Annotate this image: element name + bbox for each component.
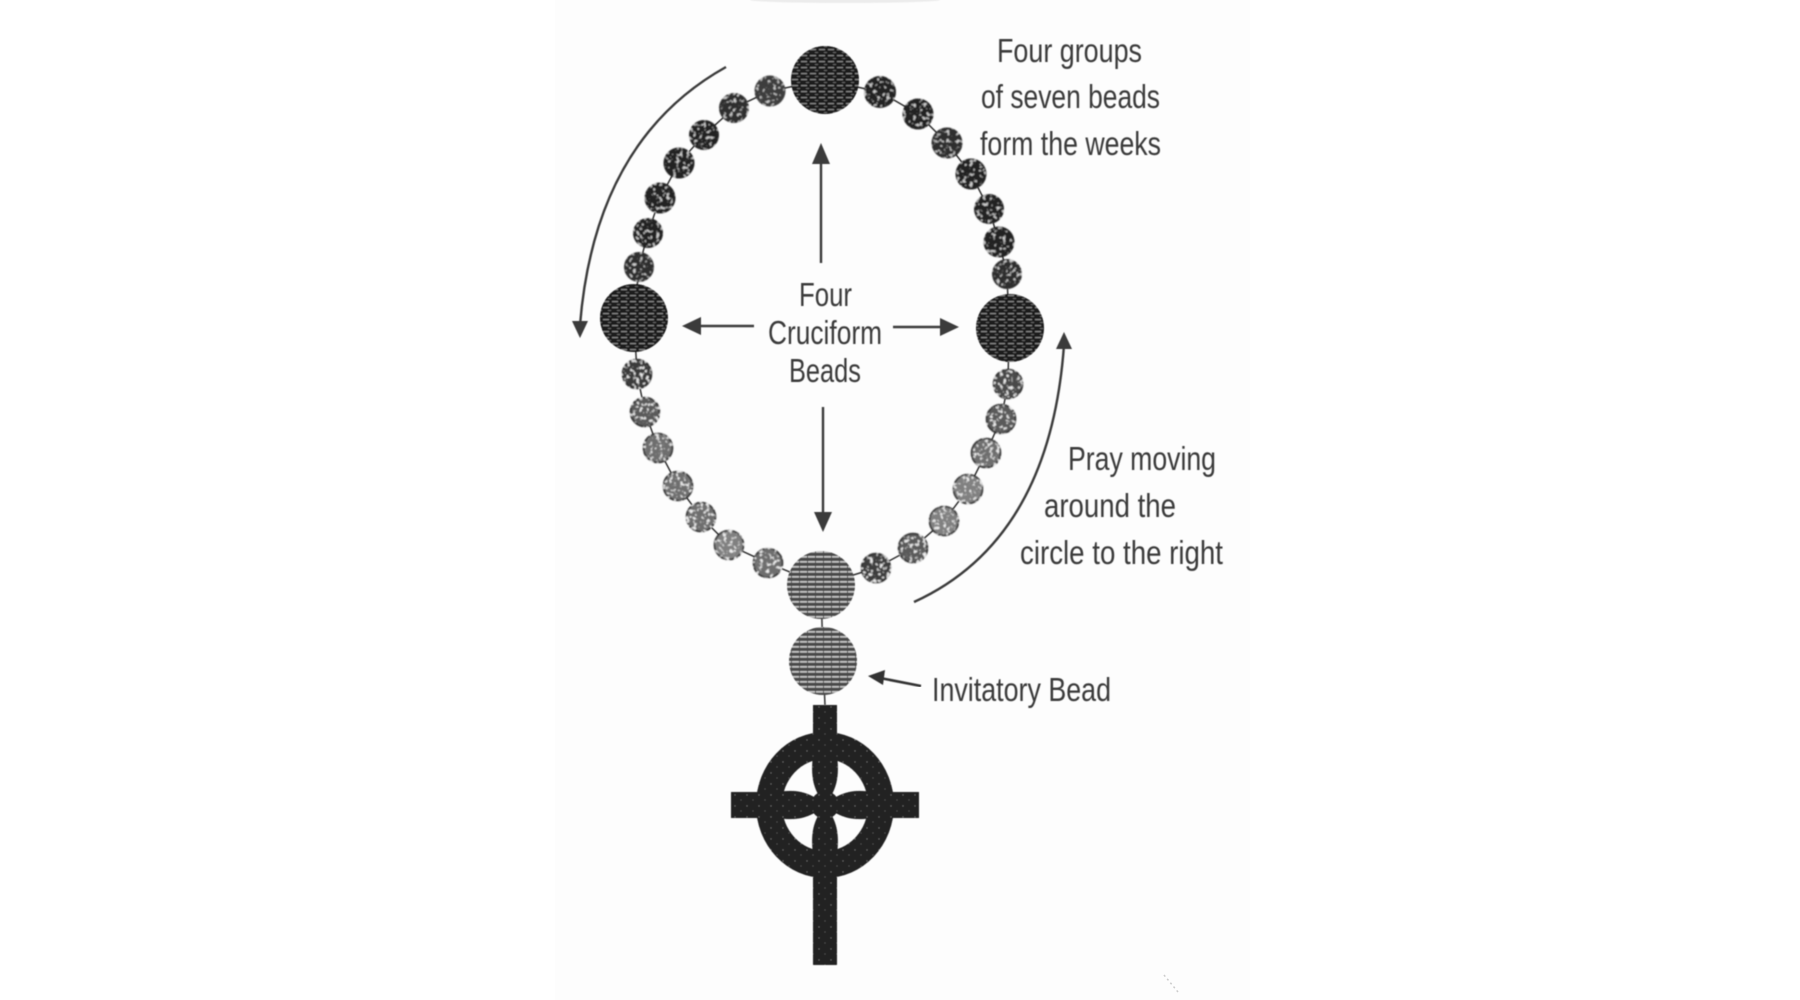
arrow: up to top bead (812, 143, 830, 263)
label: pray moving around the circle: Pray moving (1068, 440, 1216, 477)
label: four cruciform beads: Four (799, 276, 852, 313)
label: pray moving around the circle: circle to the right (1020, 534, 1223, 571)
arrow: curved right, moving around the circle (914, 332, 1072, 602)
label: pray moving around the circle: around the (1044, 487, 1176, 524)
arrow: right to right bead (893, 318, 959, 336)
arrow: to invitatory bead (868, 670, 921, 686)
label: four cruciform beads: Cruciform (768, 314, 882, 351)
label: four groups of seven beads: form the weeks (980, 125, 1161, 162)
label: four groups of seven beads: of seven beads (981, 78, 1160, 115)
cruciform beads (600, 46, 1044, 619)
arrow: curved left, counter-clockwise (572, 67, 726, 338)
lower beads: four groups of seven (622, 360, 1022, 582)
paper background (555, 0, 1250, 1000)
label: invitatory bead: Invitatory Bead (932, 671, 1111, 708)
invitatory bead (789, 627, 857, 695)
arrow: down to bottom bead (814, 407, 832, 532)
bead string (634, 80, 1009, 705)
upper beads: four groups of seven (624, 76, 1022, 289)
icon: celtic cross (731, 705, 919, 965)
arrow: left to left bead (682, 317, 754, 335)
label: four groups of seven beads: Four groups (997, 32, 1142, 69)
label: four cruciform beads: Beads (789, 352, 861, 389)
